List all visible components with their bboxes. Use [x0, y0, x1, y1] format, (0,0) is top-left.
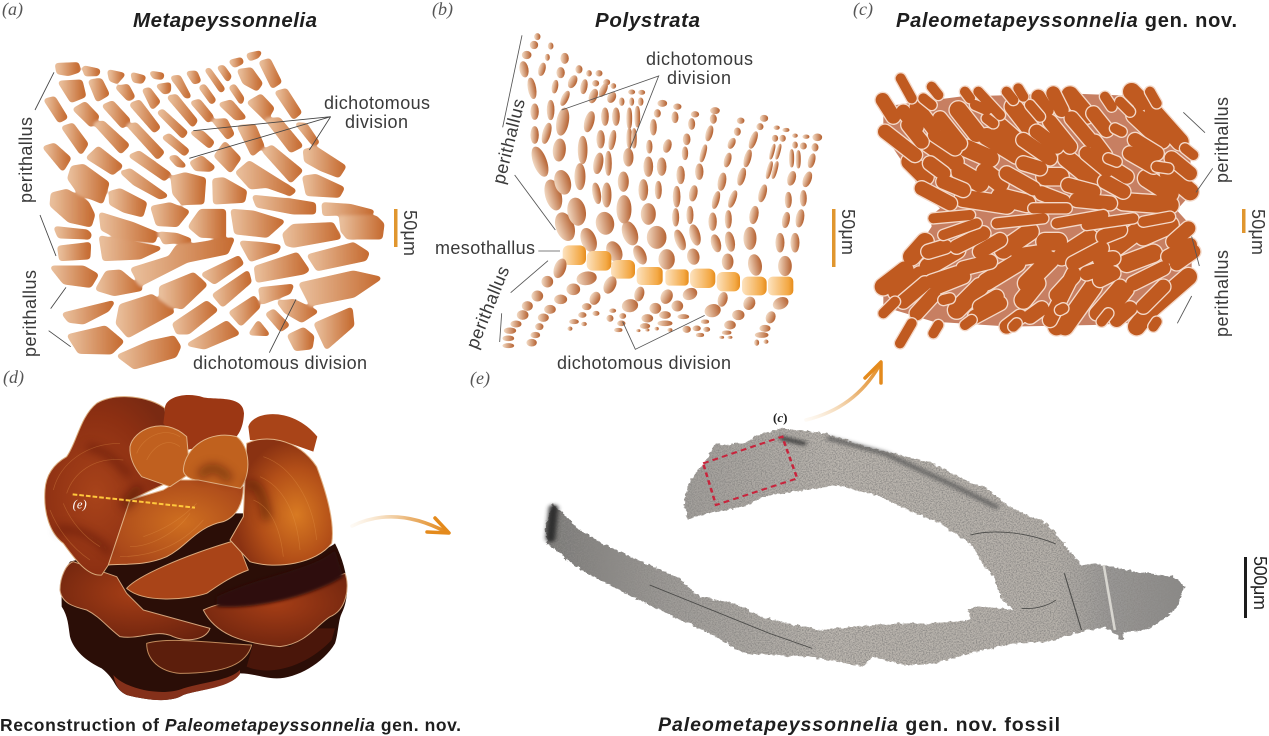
- label: dichotomous division upper: dichotomous: [646, 49, 753, 69]
- cells: Metapeyssonnelia tissue: [45, 53, 382, 367]
- curl cap: [183, 435, 248, 488]
- panel label (e): (e): [470, 368, 490, 389]
- scale text 50 µm: 50μm: [838, 209, 858, 255]
- panel c: Paleometapeyssonnelia cell diagram: [883, 78, 1268, 343]
- dark base mass: [62, 513, 347, 700]
- leader lines: [1177, 112, 1213, 323]
- scale bar 50 µm: [832, 209, 836, 267]
- dark tip and upper-edge streaks: [551, 438, 996, 538]
- panel d: mushroom-like reconstruction: [45, 395, 347, 700]
- label: perithallus lower: perithallus: [20, 270, 40, 357]
- top cap behind: [163, 395, 244, 450]
- label (e) on mushroom: (e): [73, 498, 87, 512]
- lower lobe left: [147, 640, 252, 673]
- panel b: Polystrata cell diagram: [435, 34, 858, 373]
- panel a: Metapeyssonnelia cell diagram: [16, 53, 430, 373]
- small cap: [130, 426, 190, 487]
- dark shadow band: [217, 550, 343, 607]
- leader lines: [500, 35, 705, 349]
- scale bar 50 µm: [394, 209, 398, 247]
- arrow: fossil to panel c: [806, 362, 881, 420]
- tissue with elongated cells: [883, 78, 1193, 343]
- label: mesothallus: mesothallus: [435, 238, 535, 258]
- label: perithallus lower: perithallus: [462, 263, 513, 351]
- leader lines: [35, 72, 331, 353]
- top-right small cap: [248, 414, 317, 452]
- fossil cross-section body: [545, 428, 1184, 667]
- bottom rim glow: [113, 670, 240, 700]
- scale bar 50 µm: [1242, 209, 1246, 233]
- title: Paleometapeyssonnelia gen. nov.: Paleometapeyssonnelia gen. nov.: [896, 10, 1237, 32]
- label: dichotomous division lower: dichotomous division: [557, 353, 731, 373]
- scale text 50 µm: 50μm: [400, 210, 420, 256]
- label: perithallus upper: perithallus: [1212, 97, 1232, 183]
- growth rings: [50, 433, 317, 560]
- arrow: mushroom to fossil: [352, 517, 449, 533]
- fossil section: [545, 428, 1184, 667]
- middle lobe right: [203, 573, 347, 647]
- middle lobe center: [127, 540, 248, 599]
- red dashed sampling box: [703, 437, 797, 505]
- shading on caps: [57, 447, 267, 553]
- cells: perithallus upper: [519, 34, 821, 276]
- label: perithallus upper: perithallus: [16, 117, 36, 203]
- label: dichotomous division upper: division: [667, 68, 731, 88]
- scale text 50 µm: 50μm: [1248, 209, 1268, 255]
- label (c) on fossil: (c): [773, 410, 787, 425]
- center cap: [108, 480, 243, 565]
- scale bar 500 µm: [1244, 557, 1247, 618]
- caption: fossil: Paleometapeyssonnelia gen. nov. fossil: [658, 714, 1060, 736]
- title: Polystrata: Polystrata: [595, 9, 700, 32]
- label: perithallus lower: perithallus: [1212, 250, 1232, 337]
- pale vein: [1104, 565, 1115, 630]
- cracks: [650, 532, 1081, 648]
- cells: mesothallus row: [563, 245, 793, 295]
- section line: [73, 494, 195, 508]
- caption: reconstruction: Reconstruction of Paleometapeyssonnelia gen. nov.: [0, 715, 461, 735]
- label: dichotomous division upper: dichotomous: [324, 93, 430, 113]
- label: perithallus upper: perithallus: [488, 97, 529, 186]
- label: dichotomous division lower: dichotomous division: [193, 353, 367, 373]
- title: Metapeyssonnelia: Metapeyssonnelia: [133, 9, 317, 32]
- lower lobe right dark: [247, 628, 335, 670]
- middle lobe left: [60, 562, 210, 640]
- top-left cap: [45, 397, 173, 575]
- label: dichotomous division upper: division: [345, 112, 408, 132]
- right cap: [230, 439, 332, 565]
- cells: perithallus lower: [503, 258, 789, 347]
- panel label (d): (d): [3, 367, 24, 388]
